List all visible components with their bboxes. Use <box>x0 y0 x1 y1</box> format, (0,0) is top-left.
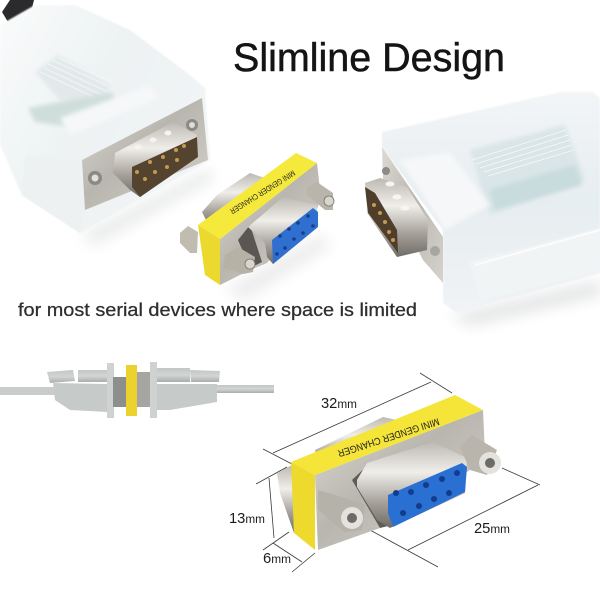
yellow band <box>198 153 317 239</box>
band text: MINI GENDER CHANGER <box>336 415 440 458</box>
photo: right translucent connector hood <box>365 92 600 326</box>
back shell <box>202 173 265 228</box>
dimension label: 25mm: 25mm <box>474 520 510 537</box>
right standoff <box>460 435 497 475</box>
photo: two cables joined by adapter <box>0 362 274 418</box>
metal plate <box>220 163 320 285</box>
yellow band <box>126 365 137 416</box>
blue socket <box>272 208 318 264</box>
blue socket <box>388 463 467 527</box>
front shell <box>248 197 318 264</box>
front shell <box>357 442 467 528</box>
large adapter with dimensions <box>277 395 501 550</box>
right connector <box>150 362 157 418</box>
title: Slimline Design <box>233 36 505 80</box>
photo: centre gender changer adapter <box>180 153 334 300</box>
back stub screw <box>180 226 198 253</box>
left connector <box>47 370 75 383</box>
dimension label: 13mm: 13mm <box>229 510 265 527</box>
centre metal <box>113 377 127 407</box>
standoffs <box>223 247 255 274</box>
dimension label: 6mm: 6mm <box>263 550 291 567</box>
band text: MINI GENDER CHANGER <box>228 168 297 216</box>
dimension lines <box>256 373 540 572</box>
photo: left translucent connector hood <box>0 0 213 245</box>
dimension label: 32mm: 32mm <box>321 395 357 412</box>
left standoff <box>318 490 365 532</box>
yellow band <box>291 395 483 475</box>
subtitle text: for most serial devices where space is limited <box>18 300 417 320</box>
